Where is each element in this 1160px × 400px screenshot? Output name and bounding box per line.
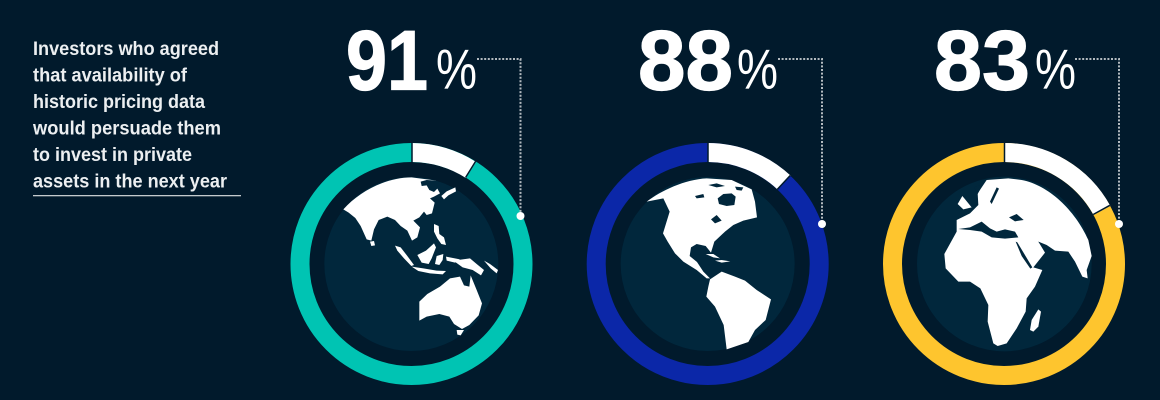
intro text block: that availability of <box>33 66 188 86</box>
dotted leader line with marker <box>1075 59 1123 228</box>
statistic: 88% <box>638 14 778 108</box>
dotted leader line with marker <box>477 59 524 220</box>
statistic: 83%: % <box>1035 38 1076 102</box>
donut ring: teal 91% <box>300 142 523 376</box>
intro text block: historic pricing data <box>33 92 205 113</box>
statistic: 91%: % <box>436 38 477 102</box>
globe disc with Europe and Africa map <box>917 177 1092 351</box>
panel: 88 percent Americas <box>596 14 826 376</box>
statistic: 91%: 91 <box>346 14 428 108</box>
intro text block: assets in the next year <box>33 172 228 192</box>
intro text block: would persuade them <box>32 118 221 140</box>
panel: 83 percent Europe and Africa <box>892 14 1123 376</box>
panel: 91 percent Asia-Pacific <box>300 14 524 376</box>
donut ring: blue 88% <box>596 142 819 376</box>
statistic: 88%: % <box>737 38 778 102</box>
intro text block: to invest in private <box>33 145 192 166</box>
dotted leader line with marker <box>778 59 826 228</box>
statistic: 83% <box>934 14 1076 108</box>
donut ring: yellow 83% <box>892 142 1116 376</box>
globe disc with Asia-Pacific map <box>324 177 498 351</box>
statistic: 88%: 88 <box>638 14 733 108</box>
intro text block <box>32 39 241 196</box>
globe disc with Americas map <box>621 177 795 351</box>
statistic: 83%: 83 <box>934 14 1030 108</box>
intro text block: Investors who agreed <box>33 39 219 60</box>
